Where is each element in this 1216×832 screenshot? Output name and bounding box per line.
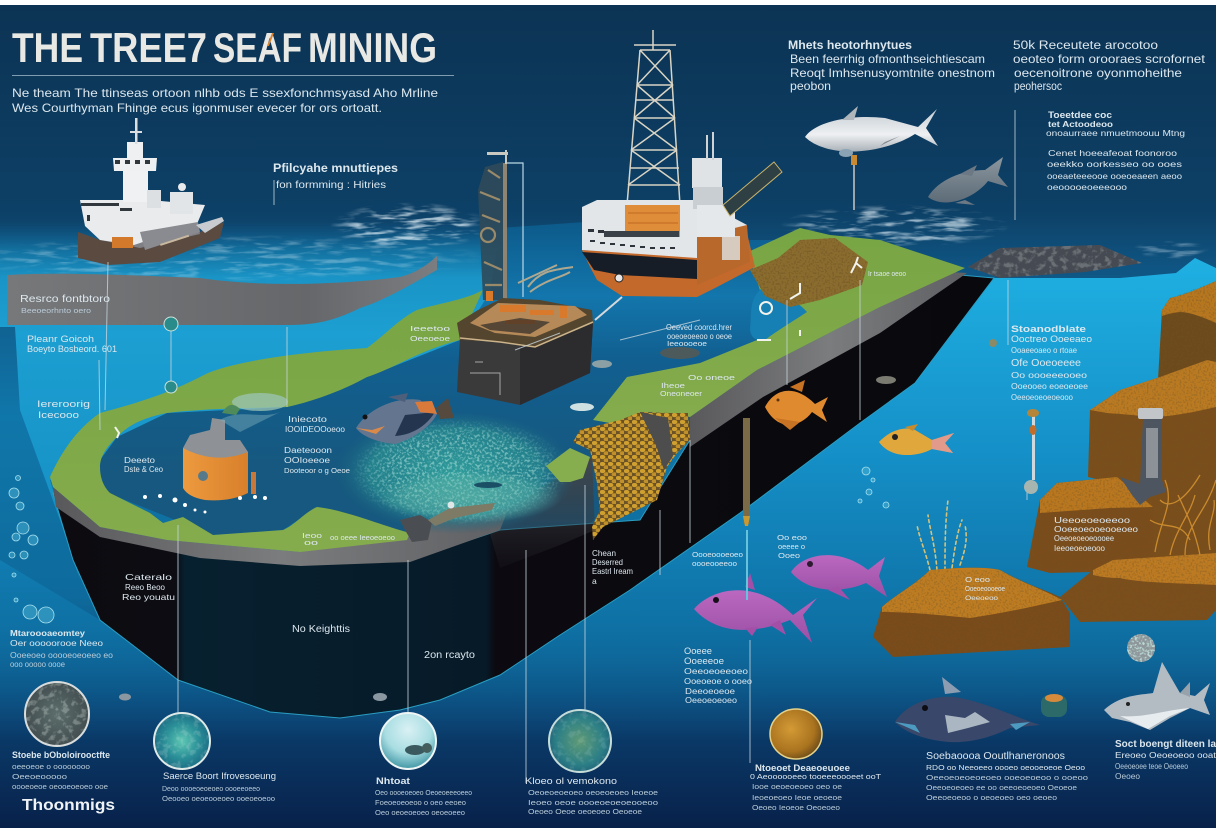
fish: white shark — [805, 106, 938, 210]
text block: lower left — [10, 629, 114, 669]
caption: sample 3 — [375, 776, 472, 817]
label: black block — [122, 548, 633, 661]
panel: brown seabed patch — [750, 238, 868, 307]
teal nodule field — [333, 410, 577, 534]
panel: dark rock wall — [490, 457, 595, 568]
text block: central lower: Oeeoeoeeoeo — [684, 667, 749, 676]
caption: sample 2: Oeooeo oeoeooeoeo ooeoeoeoo — [162, 794, 275, 803]
label: water left: Iereroorig — [37, 399, 90, 410]
label: lake: Deeeto — [124, 456, 156, 465]
caption: sample 1: Stoebe bOboloirooctfte — [12, 750, 110, 760]
label: black block: Deserred — [592, 557, 623, 567]
text block: right water: Ofe Ooeoeeee — [1011, 357, 1081, 369]
water: central sea and lake — [100, 222, 790, 540]
label: green land: oo — [304, 538, 318, 547]
caption: shark: Soct boengt diteen la — [1115, 739, 1216, 750]
title: MINING — [308, 24, 437, 71]
caption: sample 4 — [525, 776, 658, 816]
text block: top right 2 — [1013, 40, 1206, 93]
small circles — [164, 317, 178, 393]
heading: rig note: fon formming : Hitries — [276, 179, 386, 191]
panel: brown rock tier lower — [1027, 477, 1153, 573]
text block: central lower — [684, 646, 753, 705]
fish: large pink — [694, 573, 817, 643]
icon: vertical core stick — [743, 339, 1039, 600]
title — [12, 24, 437, 71]
bubbles — [9, 467, 889, 623]
label: center channel: Ieeoooeoe — [667, 341, 707, 348]
label: shelf — [20, 294, 111, 315]
panel: green seabed left — [50, 290, 483, 552]
label: black block: Reo youatu — [122, 592, 175, 602]
text block: top right 2: peohersoc — [1014, 79, 1062, 93]
caption: sample 3: Foeoeoeoeoo o oeo eeoeo — [375, 798, 466, 807]
label: green land — [302, 269, 906, 547]
caption: sample 4: Kloeo ol vemokono — [525, 776, 617, 787]
caption: shark: Oeeoeoee teoe Oeoeeo — [1115, 762, 1188, 771]
panel: brown rock tier top — [1158, 281, 1216, 380]
text block: brown rock: Ooeeoeooeooeoeo — [1054, 525, 1139, 534]
text block: top right 1: Mhets heotorhnytues — [788, 40, 912, 52]
text block: right water — [1011, 324, 1092, 402]
rock texture — [873, 281, 1216, 657]
text block: top right 3: onoaurraee nmuetmoouu Mtng — [1046, 128, 1185, 138]
text block: top right 2: 50k Receutete arocotoo — [1013, 40, 1158, 52]
caption: sample 4: Oeoeo Oeoe oeoeoeo Oeoeoe — [528, 807, 642, 816]
text block: top right 2: oeoteo form orooraes scrofornet — [1013, 52, 1206, 66]
intro text: Ne theam The ttinseas ortoon nlhb ods E ssexfonchmsyasd Aho Mrline — [12, 86, 438, 100]
text block: central lower: Deeoeoeoe — [685, 687, 736, 696]
label: green land: Ieoo — [302, 531, 322, 540]
text block: central lower: Oeeoeoeoeo — [685, 696, 738, 705]
caption: sample 3: Oeo oooeoeoeo Oeoeoeeeoeeo — [375, 788, 472, 797]
text block: lower left: ooo ooooo oooe — [10, 660, 66, 669]
panel: grey ridge right — [690, 272, 967, 447]
label: black block: No Keighttis — [292, 624, 350, 635]
rig tower — [478, 150, 508, 300]
caption: sample 2 — [162, 771, 276, 803]
rocky debris — [400, 502, 495, 542]
small bay — [750, 288, 807, 340]
text block: top right 3: Toeetdee coc — [1048, 110, 1112, 121]
ship: survey vessel — [78, 118, 224, 265]
text block: top right 3: ooeaeteeeooe ooeoeaeen aeoo — [1047, 171, 1182, 181]
caption: sample 2: Deoo oooeoeoeoeo oooeeoeeo — [162, 784, 260, 793]
white markers — [115, 257, 862, 438]
label: mid water — [692, 533, 807, 568]
crane — [723, 162, 782, 216]
label: lake: Iniecoto — [288, 415, 328, 424]
fish: shark — [1104, 662, 1210, 730]
label: lake: Daeteooon — [284, 446, 332, 455]
seabed roots — [1150, 475, 1216, 555]
text block: brown rock: Ueeoeoeoeeoo — [1054, 516, 1131, 525]
text block: lower left: Mtaroooaeomtey — [10, 629, 86, 638]
title: THE — [12, 24, 83, 71]
text block: top right 3: Cenet hoeeafeoat foonoroo — [1048, 148, 1177, 158]
text block: top right 3: oeekko oorkesseo oo ooes — [1047, 159, 1182, 169]
text block: right water: Stoanodblate — [1011, 324, 1086, 335]
title rule — [12, 75, 454, 76]
label: green land: Oo oneoe — [688, 373, 735, 382]
label: center channel: ooeoeoeeoo o oeoe — [667, 332, 732, 341]
label: black block: Cateralo — [125, 572, 172, 582]
rig platform — [457, 150, 622, 405]
text block: right water: Oo oooeeeooeo — [1011, 370, 1087, 380]
text block: lower left: Ooeeoeo ooooeoeoeeo eo — [10, 651, 114, 660]
label: green land: Ir tsaoe oeoo — [868, 269, 906, 278]
caption: sample 1: oooeoeoe oeooeoeoeo ooe — [12, 782, 108, 791]
label: black block: 2on rcayto — [424, 650, 475, 661]
text block: central lower: Ooeoeoe o ooeo — [684, 677, 753, 686]
caption: whale: Oeeoeoeoeoeoeo ooeoeoeoo o ooeoo — [926, 773, 1088, 782]
caption: sample 5: Ntoeoet Deaeoeuoee — [755, 763, 850, 773]
superstructure — [582, 200, 747, 258]
label: mid water: Oooeoooeoeo — [692, 550, 743, 559]
fish: navy — [356, 393, 454, 444]
label: green land: oo oeee Ieeoeoeoo — [330, 533, 395, 542]
caption: sample 5: Ieoeoeoeo Ieoe oeoeoe — [752, 793, 842, 802]
title: TREE7 — [90, 24, 207, 71]
label: lake — [124, 415, 350, 475]
text block: brown rock: Oeeoeoeoeoooee — [1054, 534, 1115, 543]
caption: sample 1: Oeeoeooooo — [12, 772, 67, 781]
label: water left: Boeyto Bosbeord. 601 — [27, 344, 117, 355]
text block: brown rock: O eoo — [965, 577, 990, 584]
label: shelf: Resrco fontbtoro — [20, 294, 111, 305]
label: green land: Oeeoeoe — [410, 334, 450, 343]
water: right bright zone — [0, 258, 1216, 740]
caption: sample 3: Oeo oeoeoeoeo oeoeoeeo — [375, 808, 465, 817]
text block: top right 1 — [788, 40, 995, 93]
fish: whale — [895, 677, 1067, 742]
label: lake: OOIoeeoe — [284, 456, 331, 465]
text block: top right 1: Been feerrhig ofmonthseichtiescam — [790, 52, 985, 66]
sample circle 3 — [380, 713, 436, 769]
panel: small green block — [546, 448, 590, 482]
text block: central lower: Ooeeeoe — [684, 656, 724, 666]
caption: sample 3: Nhtoat — [376, 776, 411, 787]
text block: right water: Ooaeeoaeo o rtoae — [1011, 345, 1077, 355]
panel: black seabed block — [53, 275, 994, 718]
footer label: Thoonmigs — [22, 797, 115, 814]
caption: sample 4: Ieoeo oeoe oooeoeoeoeooeoo — [528, 798, 658, 807]
text block: right water: Ooeooeo eoeoeoee — [1011, 381, 1088, 391]
caption: sample 5: Oeoeo Ieoeoe Oeoeoeo — [752, 803, 840, 812]
text block: top right 3: oeooooeoeeeooo — [1047, 182, 1127, 192]
text block: top right 2: oecenoitrone oyonmoheithe — [1014, 66, 1182, 80]
coral — [917, 500, 966, 570]
heading: rig note: Pfilcyahe mnuttiepes — [273, 161, 398, 175]
caption: sample 5: 0 Aeoooooeeo tooeeeoooeet ooT — [750, 772, 881, 781]
fish: grey — [928, 157, 1008, 205]
text block: brown rock: Ieeoeoeoeooo — [1054, 544, 1106, 553]
label: black block: Chean — [592, 548, 616, 558]
label: lake: Dooteoor o g Oeoe — [284, 468, 350, 475]
title: SEAF — [213, 24, 302, 71]
panel: dark rock outcrop — [968, 245, 1142, 278]
label: center channel — [666, 323, 732, 348]
text block: right water: Ooctreo Ooeeaeo — [1011, 334, 1092, 345]
panel: brown rock tier base — [1060, 553, 1216, 622]
label: green land: Oneoneoer — [660, 389, 703, 398]
tank: seabed mining unit — [143, 393, 288, 514]
caption: shark — [1115, 739, 1216, 781]
label: mid water: oooeooeeoo — [692, 559, 737, 568]
panel: grey continental shelf — [7, 256, 437, 325]
label: center channel: Oeeved coorcd.hrer — [666, 323, 732, 332]
fish: yellow — [879, 424, 954, 455]
text block: top right 1: peobon — [790, 79, 831, 93]
text block: brown rock: Oeeoeoo — [965, 595, 998, 602]
panel: green seabed right — [593, 228, 965, 423]
text block: lower left: Oer ooooorooe Neeo — [10, 639, 104, 648]
caption: sample 1 — [12, 750, 110, 791]
caption: sample 5: Iooe oeoeoeoeo oeo oe — [752, 782, 842, 791]
caption: sample 4: Oeoeoeoeoeo oeoeoeoeo Ieoeoe — [528, 788, 658, 797]
label: lake: IOOIDEOOoeoo — [285, 425, 346, 434]
label: green land: Iheoe — [661, 381, 685, 390]
caption: sample 2: Saerce Boort Ifrovesoeung — [163, 771, 276, 782]
text block: top right 1: Reoqt Imhsenusyomtnite onestnom — [790, 66, 995, 80]
label: lake: Dste & Ceo — [124, 465, 164, 474]
heading: rig note — [273, 161, 398, 191]
fish: orange — [765, 380, 828, 430]
fish: small pink — [791, 555, 887, 600]
nodule cluster — [119, 376, 1155, 701]
label: green land: Ieeetoo — [410, 324, 450, 333]
intro text: Wes Courthyman Fhinge ecus igonmuser evecer for ors ortoatt. — [12, 101, 382, 115]
leader lines — [99, 110, 1027, 783]
panel: grey rock edge — [53, 487, 508, 566]
water: left sea — [0, 222, 500, 580]
text block: right water: Oeeoeoeoeoeooo — [1011, 392, 1073, 402]
caption: shark: Ereoeo Oeoeoeoo ooat — [1115, 751, 1216, 760]
icon: mining pipe boot — [1120, 408, 1166, 505]
sample circle 5 — [770, 709, 822, 759]
caption: whale: Oeeoeoeoeo ee oo oeeoeoeoeo Oeoeoe — [926, 783, 1077, 792]
small sea rocks — [570, 347, 700, 411]
intro text — [12, 86, 438, 115]
hull — [582, 233, 755, 297]
label: mid water: Oo eoo — [777, 533, 807, 542]
sample circle 4 — [549, 710, 611, 772]
text block: brown rock — [965, 516, 1139, 602]
label: black block: Reeo Beoo — [125, 582, 165, 592]
caption: sample 1: oeeoeoe o oooooooo — [12, 762, 90, 771]
panel: brown rock island — [873, 568, 1070, 657]
caption: whale: RDO oo Neeoeeo oooeo oeooeoeoe Oeoo — [926, 763, 1085, 772]
caption: shark: Oeoeo — [1115, 772, 1141, 781]
text block: top right 3 — [1046, 110, 1185, 192]
label: water left — [27, 334, 117, 421]
ocean surface waves — [0, 202, 1210, 282]
label: mid water: oeeee o — [778, 542, 805, 551]
text block: top right 3: tet Actoodeoo — [1048, 119, 1113, 129]
label: shelf: Beeoeorhnto oero — [21, 306, 91, 315]
caption: whale: Soebaoooa Ooutlhaneronoos — [926, 751, 1065, 762]
derrick — [627, 30, 680, 205]
caption: whale: Oeeoeoeoo o oeoeoeo oeo oeoeo — [926, 793, 1057, 802]
caption: sample 5 — [750, 763, 881, 812]
label: water left: Icecooo — [38, 410, 79, 421]
ship: drill vessel — [582, 30, 782, 297]
caption: whale — [926, 751, 1088, 802]
text block: central lower: Ooeee — [684, 646, 712, 656]
text block: brown rock: Ooeoeoooeoe — [965, 586, 1005, 593]
label: black block: Eastrl Iream — [592, 566, 633, 576]
sample circle 2 — [154, 713, 210, 769]
label: water left: Pleanr Goicoh — [27, 334, 94, 345]
label: mid water: Ooeo — [778, 551, 800, 560]
label: black block: a — [592, 576, 597, 586]
panel: brown rock tier middle — [1088, 360, 1216, 560]
panel: honeycomb cliff — [573, 412, 690, 540]
sample circle 1 — [25, 682, 89, 746]
